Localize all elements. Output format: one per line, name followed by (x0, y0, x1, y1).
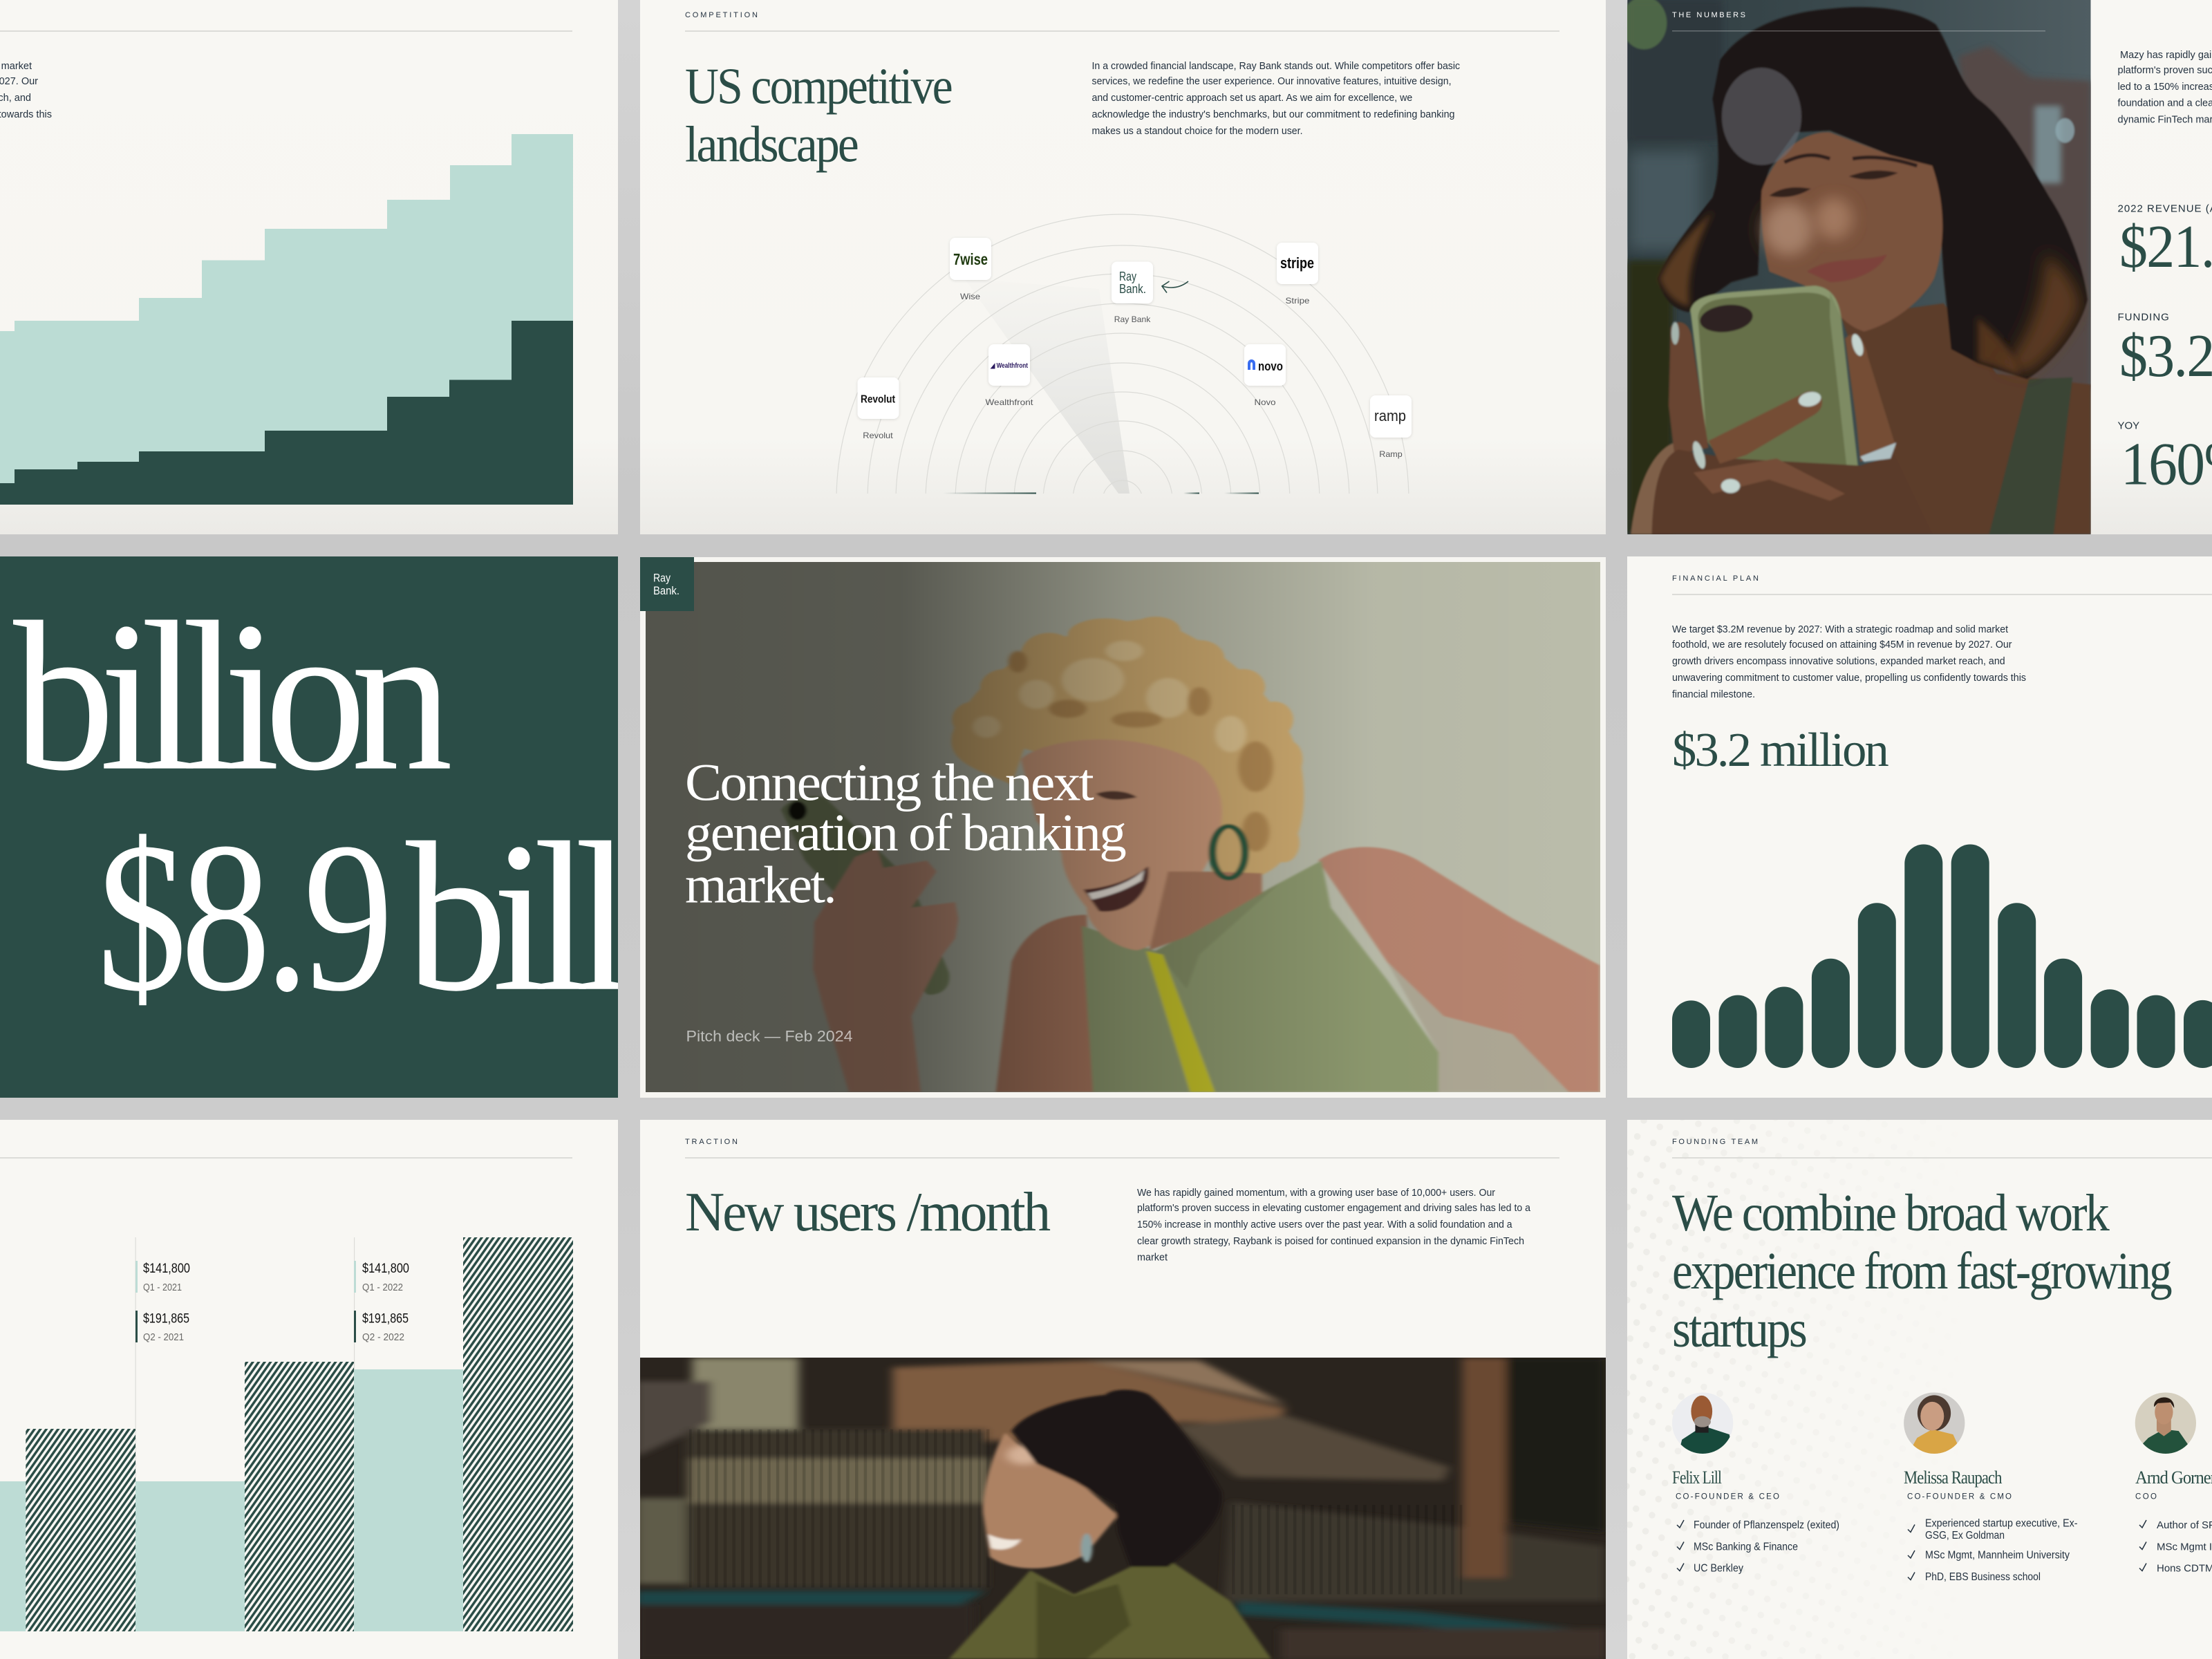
legend: 2021 quarters: $191,865 (143, 1312, 189, 1326)
team member: Melissa Raupach (1904, 1468, 2078, 1583)
logo card: Wealthfront (986, 344, 1033, 407)
text: competition paragraph: acknowledge the industry's benchmarks, but our commitment to redefining banking (1092, 109, 1454, 120)
team member: Felix Lill: Founder of Pflanzenspelz (exited) (1694, 1519, 1839, 1531)
hair (1658, 7, 2088, 379)
big number: billion: billion (13, 579, 453, 816)
text: traction paragraph: 150% increase in monthly active users over the past year. With a solid foundation and a (1137, 1219, 1512, 1230)
logo card: Stripe: Stripe (1286, 296, 1310, 306)
logo card: Ramp: ramp (1374, 407, 1406, 424)
text: pitch deck date: Pitch deck — Feb 2024 (686, 1027, 853, 1045)
face (1021, 740, 1222, 950)
panel: cover slide (636, 546, 1618, 1113)
stat: year over year: YOY (2118, 420, 2139, 431)
text: competition paragraph: In a crowded financial landscape, Ray Bank stands out. While competitors offer basic (1092, 60, 1461, 72)
phone (1690, 285, 1858, 474)
avatar: Felix Lill (1671, 1391, 1735, 1455)
team member: Felix Lill: MSc Banking & Finance (1694, 1541, 1798, 1553)
eyebrow: traction: TRACTION (685, 1138, 738, 1146)
heading: we combine broad work experience (1672, 1184, 2172, 1358)
panel: revenue growth step chart (0, 0, 618, 534)
team member: Melissa Raupach: Experienced startup executive, Ex- (1925, 1518, 2078, 1529)
hoodie (949, 1564, 1271, 1659)
legend: 2021 quarters (135, 1261, 190, 1343)
avatar: Arnd Gorner (2133, 1391, 2197, 1455)
heading: we combine broad work experience: We combine broad work (1672, 1184, 2110, 1242)
logo card: Wealthfront: ◢ Wealthfront (990, 362, 1029, 370)
team member: Arnd Gorner: COO (2135, 1493, 2157, 1501)
text: financial plan paragraph: unwavering commitment to customer value, propelling us confidently towards this (1672, 672, 2026, 684)
heading: connecting the next generation: Connecting the next (685, 754, 1094, 812)
logo card: Wise (950, 238, 991, 301)
text: partial financial plan paragraph: market (1, 61, 32, 72)
logo card: Ray Bank: Ray Bank (1114, 315, 1151, 324)
team member: Felix Lill: UC Berkley (1694, 1562, 1743, 1575)
photo: laughing woman with phone (636, 546, 1618, 1113)
logo card: Ramp (1370, 395, 1412, 459)
hair (951, 617, 1304, 875)
chart: hatched bars (26, 1237, 573, 1631)
lens flares (1621, 0, 1667, 49)
logo card: Wise: Wise (960, 292, 980, 301)
chart: mint bars (0, 1369, 463, 1631)
phone (781, 796, 949, 995)
team member: Felix Lill: Felix Lill (1672, 1468, 1722, 1488)
eyebrow: the numbers: THE NUMBERS (1672, 11, 1745, 19)
logo card: Ray Bank: Ray (1119, 270, 1136, 283)
heading: US competitive landscape: landscape (685, 117, 858, 174)
legend: 2021 quarters: Q1 - 2021 (143, 1282, 182, 1293)
big number: $8.9 billion (97, 799, 845, 1036)
heading: new users per month: New users /month (685, 1182, 1050, 1243)
panel: founding team (1627, 1120, 2212, 1659)
legend: 2021 quarters: $141,800 (143, 1262, 190, 1276)
hands (1669, 322, 1709, 455)
panel: the numbers (1621, 0, 2212, 534)
face (983, 1433, 1118, 1568)
chart: dark area steps (0, 321, 573, 505)
yellow strap (1146, 951, 1215, 1092)
heading: US competitive landscape: US competitive (685, 58, 952, 115)
text: competition paragraph: and customer-centric approach set us apart. As we aim for excellence, we (1092, 92, 1412, 104)
text: traction paragraph (1137, 1187, 1531, 1264)
logo card: Novo (1244, 344, 1286, 407)
logo: Ray Bank tag: Bank. (653, 584, 679, 597)
logo card: Wise: 7wise (953, 250, 988, 268)
legend: 2022 quarters: Q2 - 2022 (362, 1331, 404, 1343)
text: traction paragraph: clear growth strategy, Raybank is poised for continued expansion in the dynamic FinTech (1137, 1235, 1524, 1247)
text: financial plan paragraph: financial milestone. (1672, 688, 1755, 700)
logo card: Stripe (1277, 243, 1318, 306)
big number: $8.9 billion: billion (406, 799, 845, 1036)
arrow: points to Ray Bank (1162, 281, 1188, 293)
panel: financial plan (1627, 556, 2212, 1098)
logo card: Ramp: Ramp (1379, 449, 1403, 459)
team member: Melissa Raupach: GSG, Ex Goldman (1925, 1530, 2005, 1541)
logo card: Stripe: stripe (1280, 254, 1314, 272)
logo card: Revolut: Revolut (863, 431, 893, 440)
team member: Felix Lill (1672, 1468, 1839, 1575)
legend: 2022 quarters: Q1 - 2022 (362, 1282, 403, 1293)
heading: connecting the next generation: market. (685, 856, 835, 915)
mouth (1084, 866, 1149, 912)
avatars: team portraits (1671, 1391, 2197, 1455)
photo: smiling woman in olive hoodie (636, 1357, 1618, 1659)
heading: connecting the next generation (685, 754, 1126, 915)
logo card: Ray Bank: Bank. (1119, 282, 1146, 296)
team member: Melissa Raupach: MSc Mgmt, Mannheim University (1925, 1550, 2070, 1561)
big number: $8.9 billion: $8.9 (97, 799, 388, 1036)
avatar: Melissa Raupach (1902, 1391, 1967, 1455)
eyebrow: founding team: FOUNDING TEAM (1672, 1138, 1758, 1146)
face (1761, 132, 1942, 332)
logo card: Wealthfront: Wealthfront (986, 397, 1033, 407)
team member: Arnd Gorner (2135, 1468, 2212, 1575)
eyebrow: financial plan: FINANCIAL PLAN (1672, 574, 1759, 583)
panel: quarterly revenue bars (0, 1120, 618, 1659)
logo card: Ray Bank (1112, 261, 1153, 324)
text: financial plan paragraph (1672, 624, 2026, 700)
panel: traction (636, 1120, 1618, 1659)
legend: 2022 quarters: $141,800 (362, 1262, 409, 1276)
logo: Ray Bank tag (640, 557, 694, 611)
logo card: Revolut: Revolut (861, 394, 896, 405)
chart: mint area steps (0, 134, 573, 505)
eyebrow: competition: COMPETITION (685, 11, 758, 19)
chart: rounded bars (1672, 845, 2212, 1068)
team member: Melissa Raupach: PhD, EBS Business school (1925, 1571, 2041, 1583)
neck and chest (1841, 303, 2091, 534)
photo: woman looking at phone (1621, 0, 2091, 534)
text: traction paragraph: market (1137, 1251, 1168, 1264)
text: traction paragraph: We has rapidly gained momentum, with a growing user base of 10,000+ users. Our (1137, 1187, 1495, 1199)
text: financial plan paragraph: foothold, we are resolutely focused on attaining $45M in revenue by 2027. Our (1672, 639, 2012, 650)
heading: US competitive landscape (685, 58, 952, 174)
text: financial plan paragraph: We target $3.2M revenue by 2027: With a strategic roadmap and solid market (1672, 624, 2009, 635)
wedge: highlighted sector (1012, 344, 1130, 494)
earring (1212, 826, 1245, 879)
heading: connecting the next generation: generation of banking (685, 804, 1126, 862)
stat: funding: FUNDING (2118, 311, 2170, 324)
left shoulder (1630, 442, 1676, 534)
text: competition paragraph (1092, 60, 1461, 137)
green knit top (1082, 861, 1438, 1092)
logo card: Revolut (857, 377, 899, 440)
hand (813, 848, 958, 1092)
heading: we combine broad work experience: startups (1672, 1300, 1806, 1358)
logo card: Novo: novo (1258, 359, 1283, 373)
text: competition paragraph: makes us a standout choice for the modern user. (1092, 125, 1302, 137)
text: traction paragraph: platform's proven success in elevating customer engagement and driving sales has led to a (1137, 1202, 1531, 1214)
tank top (1989, 377, 2072, 534)
legend: 2021 quarters: Q2 - 2021 (143, 1331, 184, 1343)
logo card: Novo: Novo (1254, 397, 1276, 407)
logo: Ray Bank tag: Ray (653, 571, 671, 585)
legend: 2022 quarters: $191,865 (362, 1312, 409, 1326)
big number: $3.2 million: $3.2 million (1672, 724, 1888, 777)
team member: Melissa Raupach: Melissa Raupach (1904, 1468, 2002, 1488)
legend: 2022 quarters (354, 1261, 409, 1343)
chart: radial competitive map (836, 214, 1413, 494)
team member: Felix Lill: CO-FOUNDER & CEO (1676, 1493, 1779, 1501)
text: numbers paragraph (2118, 50, 2212, 126)
panel: competition (640, 0, 1606, 534)
hair (1011, 1389, 1222, 1567)
text: competition paragraph: services, we redefine the user experience. Our innovative features, intuitive design, (1092, 75, 1452, 87)
team member: Melissa Raupach: CO-FOUNDER & CMO (1907, 1493, 2012, 1501)
text: partial financial plan paragraph (0, 61, 52, 120)
text: financial plan paragraph: growth drivers encompass innovative solutions, expanded market reach, and (1672, 655, 2005, 667)
arm and shoulder (1387, 962, 1568, 1092)
panel: large billion figure (0, 556, 845, 1098)
